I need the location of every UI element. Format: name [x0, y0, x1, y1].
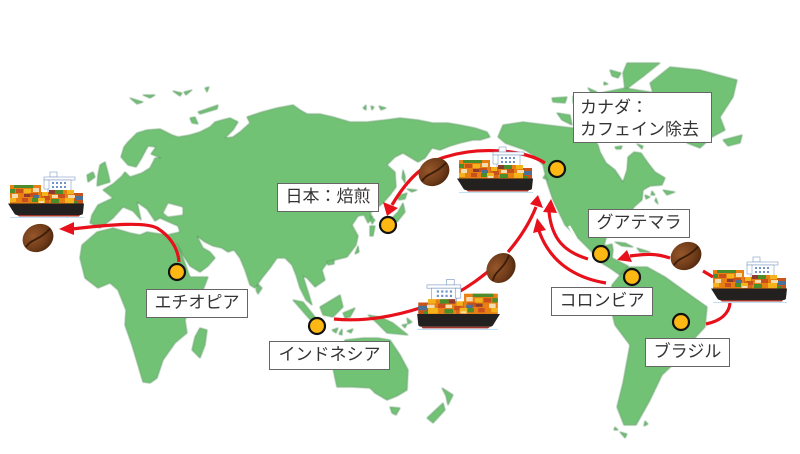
dot: Japan [380, 217, 396, 233]
landmass: Baffin Island [590, 88, 690, 142]
arrowheads [59, 195, 632, 262]
strait: Baja California gulf [569, 226, 576, 238]
continent: Australia [333, 338, 408, 415]
label: Guatemala: グアテマラ [596, 213, 682, 232]
icon: coffee bean Caribbean [665, 236, 707, 276]
landmass: Greenland [650, 67, 737, 148]
continent: South America [610, 267, 707, 438]
islands: Caribbean [615, 242, 650, 252]
icon: coffee bean west [17, 218, 59, 258]
dot: Colombia [624, 269, 640, 285]
label: Canada decaffeination [573, 92, 712, 143]
islands: New Zealand [427, 388, 453, 423]
arrowhead: Japan [383, 202, 398, 216]
islands: Madagascar, Sri Lanka, Hainan, Taiwan [192, 246, 359, 358]
icon: coffee bean north Pacific [413, 152, 455, 192]
label: Japan roasting: 日本：焙煎 [286, 187, 370, 206]
arrow: Ethiopia to ship west [72, 224, 179, 262]
routes [72, 151, 730, 324]
islands: Japan and Sakhalin [370, 170, 417, 236]
arrow: Indonesia to Canada [334, 207, 536, 320]
continent: Eurasia and Africa [80, 105, 490, 383]
icon: container ship Pacific north [457, 147, 533, 192]
label: Canada decaffeination: カナダ： [580, 98, 648, 117]
label: Brazil [645, 338, 730, 367]
icon: container ship west [8, 172, 84, 218]
location dots [169, 161, 689, 334]
islands: Indonesia [293, 295, 412, 335]
arrowhead: Indonesia route [530, 195, 543, 208]
islands: Europe and Arctic [87, 87, 386, 186]
arrow: Guatemala to Canada [549, 212, 588, 259]
dot: Canada [549, 161, 565, 177]
label: Guatemala [588, 209, 690, 238]
arrowhead: Guatemala route [543, 199, 557, 213]
icon: container ship east [711, 257, 787, 302]
label: Colombia: コロンビア [560, 291, 644, 310]
label: Ethiopia: エチオピア [154, 293, 240, 312]
sea: Black Sea [163, 203, 183, 217]
icon: coffee bean south Pacific [480, 247, 522, 289]
world map [80, 63, 742, 438]
dot: Brazil [673, 314, 689, 330]
arrowhead: Colombia route [533, 218, 546, 233]
label: Ethiopia [146, 289, 248, 318]
label: Canada decaffeination: カフェイン除去 [580, 120, 699, 138]
dot: Indonesia [309, 318, 325, 334]
icon: container ship Pacific south [417, 279, 500, 329]
dot: Ethiopia [169, 264, 185, 280]
label: Brazil: ブラジル [654, 342, 721, 361]
label: Indonesia [269, 341, 390, 370]
island: Iceland [723, 135, 742, 146]
label: Indonesia: インドネシア [278, 345, 380, 364]
arrowhead: west of Africa [59, 222, 74, 235]
label: Colombia [551, 287, 653, 316]
islands: Canadian Arctic [543, 63, 675, 204]
arrow: Colombia to Canada [539, 231, 606, 283]
arrow: Brazil to Guatemala [630, 254, 730, 324]
arrowhead: Brazil route [617, 250, 632, 262]
dot: Guatemala [593, 246, 609, 262]
label: Japan roasting [277, 183, 379, 212]
arrow: Canada to Japan [392, 151, 545, 205]
continent: North America [498, 122, 665, 275]
